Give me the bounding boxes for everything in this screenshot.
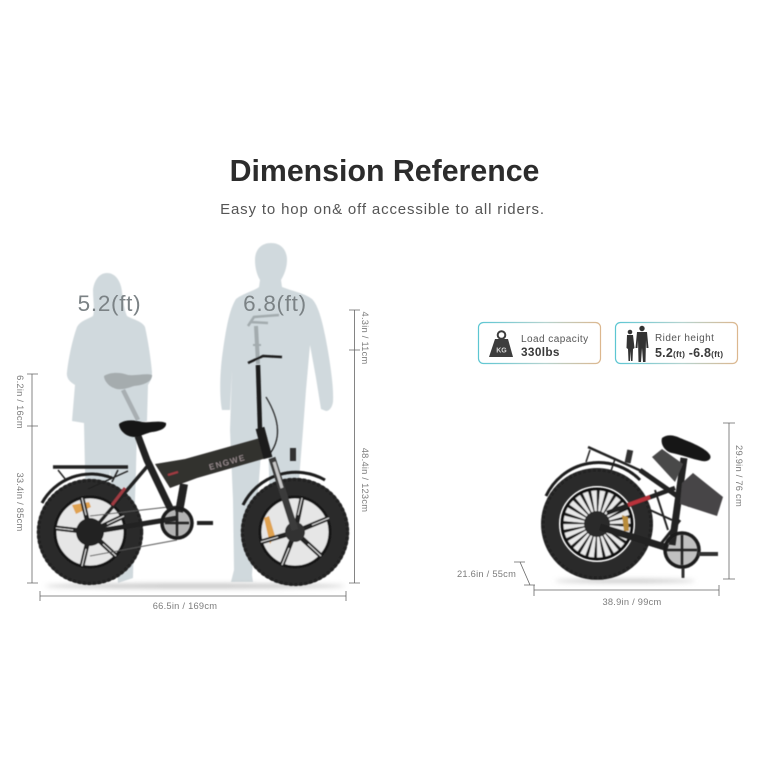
- icon: riders: [626, 326, 648, 362]
- folding frame body: ENGWE: [208, 453, 247, 472]
- saddle: [662, 435, 711, 461]
- dimension: handlebar height: 48.4in / 123cm: [360, 448, 370, 512]
- rear rack: [586, 447, 648, 474]
- dimension: folded length: [534, 585, 719, 607]
- rear triangle: [90, 462, 178, 556]
- card: load capacity: 330lbs: [521, 345, 560, 359]
- dimension: handlebar raise: [349, 310, 370, 364]
- dimension: handlebar raise: 4.3in / 11cm: [360, 312, 370, 364]
- silhouette: shorter rider: [67, 273, 152, 583]
- dimension: folded height: [723, 423, 744, 579]
- fenders: [42, 472, 325, 505]
- icon: weight: KG: [496, 348, 507, 354]
- dimension: seat height: [15, 426, 38, 583]
- saddle and post: [119, 420, 170, 508]
- dimension: seat raise: 6.2in / 16cm: [15, 375, 25, 429]
- dimension: seat raise: [15, 374, 38, 429]
- title: Dimension Reference: [230, 155, 539, 188]
- stem, handlebar and cable: [248, 356, 282, 458]
- folded bike: [543, 435, 723, 583]
- front fork and lamp: [272, 448, 296, 530]
- front wheel: [242, 480, 348, 584]
- dimension: folded height: 29.9in / 76 cm: [734, 445, 744, 507]
- crank and chainring: [162, 508, 213, 538]
- dimension: length: [40, 591, 346, 611]
- unfolded bike: [38, 315, 348, 588]
- rear wheel: [543, 463, 651, 578]
- height label 5.2 ft: 5.2(ft): [78, 291, 141, 316]
- stays and tubes: [600, 458, 690, 548]
- lower frame section: [680, 473, 723, 516]
- rear rack: [53, 467, 128, 489]
- ghost raised handlebar: [248, 315, 279, 364]
- dimension: folded width: 21.6in / 55cm: [457, 569, 516, 579]
- dimension: length: 66.5in / 169cm: [153, 601, 217, 611]
- dimension: handlebar height: [349, 350, 370, 583]
- silhouette: taller rider: [220, 243, 333, 583]
- card: load capacity: [478, 322, 600, 364]
- card: rider height: Rider height: [655, 333, 714, 344]
- crank, pedal and kickstand: [665, 533, 718, 578]
- card: load capacity: Load capacity: [521, 334, 589, 345]
- dimension: folded width: [457, 562, 535, 585]
- upper frame section: [652, 449, 683, 482]
- card: rider height: 5.2(ft) -6.8(ft): [655, 346, 723, 360]
- dimension: seat height: 33.4in / 85cm: [15, 472, 25, 532]
- ghost raised saddle: [104, 373, 152, 420]
- ground shadow: [45, 584, 345, 588]
- folding frame body: [155, 438, 270, 512]
- rear wheel: [38, 480, 142, 584]
- ground shadow: [555, 579, 695, 583]
- card: rider height: [616, 322, 738, 364]
- height label 6.8 ft: 6.8(ft): [243, 291, 307, 316]
- subtitle: Easy to hop on& off accessible to all riders.: [220, 201, 545, 218]
- dimension: folded length: 38.9in / 99cm: [602, 597, 662, 607]
